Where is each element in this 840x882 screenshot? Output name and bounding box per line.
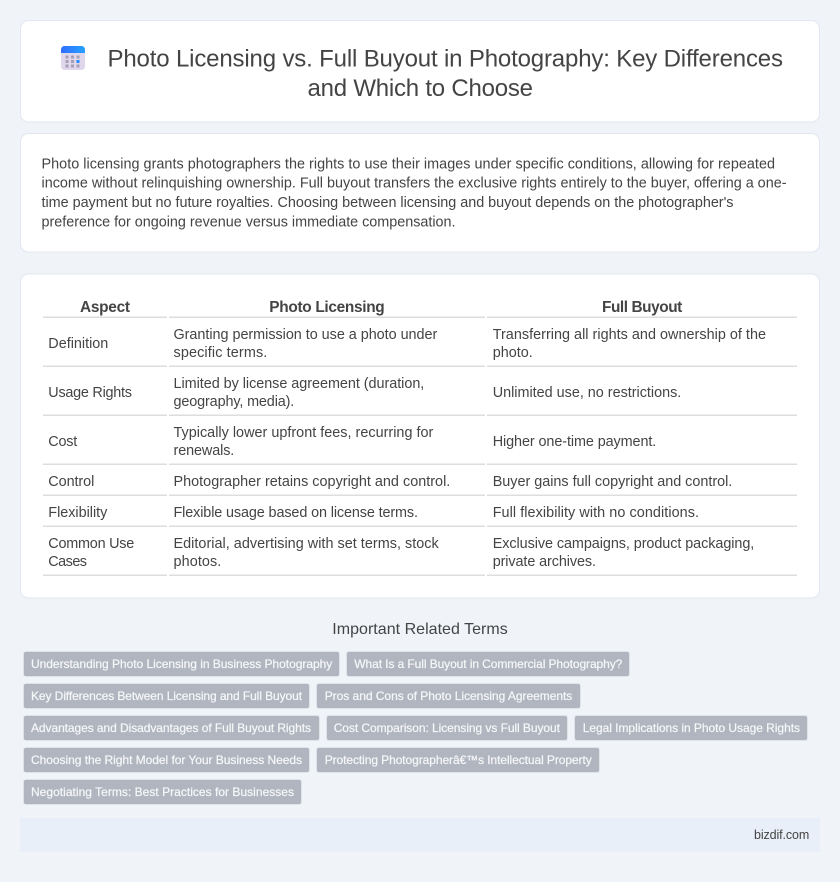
row: definition: specific terms. — [174, 345, 267, 361]
tag — [24, 780, 302, 804]
text block: intro paragraph: income without relinquishing ownership. Full buyout transfers the exclusive rights entirely to the buyer, offering a one- — [42, 176, 787, 192]
panel: intro text — [20, 134, 820, 252]
title: and Which to Choose — [308, 75, 533, 102]
row: common use cases: Exclusive campaigns, product packaging, — [493, 536, 754, 552]
tag: Advantages and Disadvantages of Full Buyout Rights — [31, 721, 311, 735]
row: common use cases: Editorial, advertising with set terms, stock — [174, 536, 439, 552]
tag — [574, 716, 808, 740]
row: control: Photographer retains copyright and control. — [174, 474, 450, 490]
row: usage rights — [48, 376, 681, 410]
text block: intro paragraph: preference for ongoing revenue versus immediate compensation. — [42, 215, 456, 231]
tag — [24, 716, 320, 740]
row: common use cases — [48, 536, 754, 570]
panel: related term tags — [24, 652, 808, 804]
row: flexibility: Flexible usage based on license terms. — [174, 505, 418, 521]
row: definition: Definition — [48, 336, 108, 352]
panel: comparison table — [20, 274, 820, 598]
row: flexibility: Flexibility — [48, 505, 108, 521]
tag: Cost Comparison: Licensing vs Full Buyout — [334, 721, 561, 735]
text block: intro paragraph: time payment but no future royalties. Choosing between licensing and buyout depends on the photographer's — [42, 195, 734, 211]
tag: Pros and Cons of Photo Licensing Agreements — [325, 689, 572, 703]
table header — [80, 299, 682, 316]
table header: Photo Licensing — [269, 299, 385, 316]
row: flexibility — [48, 505, 699, 521]
tag: Choosing the Right Model for Your Business Needs — [31, 753, 302, 767]
text block: intro paragraph: Photo licensing grants photographers the rights to use their images under specific conditions, allowing for repeated — [42, 156, 775, 172]
tag: Key Differences Between Licensing and Full Buyout — [31, 689, 303, 703]
title — [108, 46, 783, 102]
tag — [316, 684, 580, 708]
title: Photo Licensing vs. Full Buyout in Photography: Key Differences — [108, 46, 783, 72]
row: common use cases: Cases — [48, 554, 87, 570]
row: control: Control — [48, 474, 94, 490]
tag — [24, 652, 340, 676]
row: flexibility: Full flexibility with no conditions. — [493, 505, 699, 521]
tag — [326, 716, 568, 740]
row: cost: Higher one-time payment. — [493, 434, 656, 450]
row: usage rights: Usage Rights — [48, 385, 132, 401]
tag — [24, 684, 310, 708]
row: control: Buyer gains full copyright and control. — [493, 474, 732, 490]
row: cost: Cost — [48, 434, 77, 450]
footer source text: bizdif.com — [754, 828, 809, 842]
row: common use cases: private archives. — [493, 554, 596, 570]
icon: calendar — [61, 46, 85, 70]
row: common use cases: photos. — [174, 554, 221, 570]
row: control — [48, 474, 732, 490]
row: definition — [48, 327, 766, 361]
footer — [20, 818, 820, 852]
row: common use cases: Common Use — [48, 536, 134, 552]
row: usage rights: geography, media). — [174, 394, 294, 410]
tag: What Is a Full Buyout in Commercial Photography? — [354, 657, 623, 671]
tag: Legal Implications in Photo Usage Rights — [583, 721, 800, 735]
row: cost — [48, 425, 656, 459]
table header: Full Buyout — [602, 299, 682, 316]
panel: title card — [20, 20, 820, 122]
tag: Understanding Photo Licensing in Business Photography — [31, 657, 332, 671]
row: usage rights: Limited by license agreement (duration, — [174, 376, 424, 392]
row: usage rights: Unlimited use, no restrictions. — [493, 385, 681, 401]
row: definition: Granting permission to use a photo under — [174, 327, 438, 343]
tag — [346, 652, 630, 676]
row: cost: renewals. — [174, 443, 234, 459]
row: cost: Typically lower upfront fees, recurring for — [174, 425, 434, 441]
text block: intro paragraph — [42, 156, 787, 231]
table header: Aspect — [80, 299, 130, 316]
tag — [316, 748, 600, 772]
row: definition: Transferring all rights and ownership of the — [493, 327, 766, 343]
heading: important related terms: Important Related Terms — [332, 621, 508, 638]
row: definition: photo. — [493, 345, 533, 361]
tag: Protecting Photographerâ€™s Intellectual Property — [325, 753, 592, 767]
tag: Negotiating Terms: Best Practices for Businesses — [31, 785, 294, 799]
tag — [24, 748, 310, 772]
